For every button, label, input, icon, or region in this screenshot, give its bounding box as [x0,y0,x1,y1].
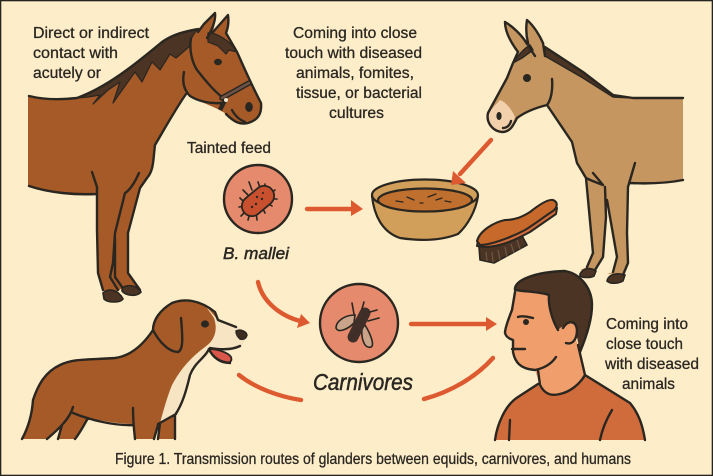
arrow: human curve [424,358,493,399]
text: coming into close touch with diseased animals: with diseased [604,356,699,373]
text: coming into close touch with diseased animals, fomites: cultures [329,105,384,122]
horse forelock [208,33,237,54]
horse hooves [103,286,141,302]
text: Carnivores: Carnivores [313,369,413,395]
dog chest and muzzle [160,305,246,423]
horse mane [77,30,197,104]
illustration: human [495,271,645,440]
text: direct or indirect contact: acutely or [33,65,102,82]
text: coming into close touch with diseased animals: animals [622,376,675,393]
arrow: donkey to bowl [451,140,491,185]
arrow: fly to human [411,317,497,331]
hair [515,271,592,352]
text: direct or indirect contact: Direct or indirect [33,25,150,42]
text: coming into close touch with diseased animals [604,316,699,393]
face and neck [505,292,585,395]
illustration: horse [28,13,261,302]
icon: bacterium circle [224,165,292,233]
shirt [495,375,645,440]
horse details: halter and eye [222,83,249,98]
caption: Figure 1. Transmission routes of glanders between equids, carnivores, and humans [115,451,631,468]
arrow: dog curve [239,375,301,400]
ear [562,322,577,343]
text: coming into close touch with diseased animals, fomites [285,25,422,122]
icon: feed bowl [372,180,478,240]
text: coming into close touch with diseased animals: Coming into [606,316,688,333]
illustration: donkey [488,20,683,283]
arrow: bacterium to bowl [307,200,363,216]
text: coming into close touch with diseased animals: close touch [606,336,683,353]
text: B. mallei: B. mallei [223,244,290,263]
donkey mane [513,45,633,98]
dog tongue [209,349,231,363]
text: coming into close touch with diseased animals, fomites: touch with diseased [285,45,422,62]
illustration: dog [22,300,247,439]
text: direct or indirect contact: contact with [33,45,118,62]
text: tainted feed: Tainted feed [187,140,271,157]
icon: fly circle [320,284,398,362]
text: direct or indirect contact [33,25,150,82]
icon: grooming brush [477,200,557,263]
arrow: bacterium to fly [258,282,310,328]
text: coming into close touch with diseased animals, fomites: tissue, or bacterial [296,85,422,102]
donkey muzzle [488,100,515,132]
text: coming into close touch with diseased animals, fomites: animals, fomites, [296,65,414,82]
donkey hooves [580,269,625,283]
text: coming into close touch with diseased animals, fomites: Coming into close [293,25,417,42]
